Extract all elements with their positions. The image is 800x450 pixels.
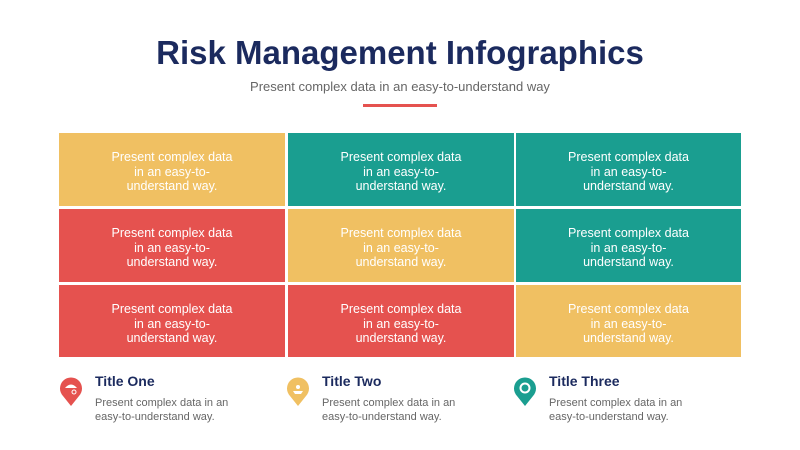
- cell r1c1: Present complex data: [112, 150, 232, 164]
- icon: teal pin: [514, 378, 536, 406]
- cell r2c1: understand way.: [127, 255, 217, 269]
- footer item three: Title Three: [549, 373, 620, 389]
- cell r1c2: [288, 133, 514, 206]
- cell r1c1: understand way.: [127, 179, 217, 193]
- cell r1c3: understand way.: [583, 179, 674, 193]
- title: Risk Management Infographics: [156, 34, 644, 71]
- cell r1c3: Present complex data: [568, 150, 689, 164]
- cell r3c3: in an easy-to-: [591, 316, 666, 330]
- cell r3c2: Present complex data: [341, 302, 461, 316]
- cell r3c2: [288, 285, 514, 357]
- cell r2c3: understand way.: [583, 255, 674, 269]
- cell r3c3: [516, 285, 741, 357]
- cell r1c3: in an easy-to-: [591, 164, 666, 178]
- icon: red pin: [60, 378, 82, 406]
- cell r2c2: [288, 209, 514, 282]
- cell r2c2: Present complex data: [341, 226, 461, 240]
- cell r3c1: [59, 285, 285, 357]
- cell r2c2: understand way.: [356, 255, 446, 269]
- cell r3c2: in an easy-to-: [363, 316, 439, 330]
- cell r2c3: [516, 209, 741, 282]
- cell r2c3: Present complex data: [568, 226, 689, 240]
- cell r2c3: in an easy-to-: [591, 240, 666, 254]
- cell r1c1: [59, 133, 285, 206]
- cell r3c3: understand way.: [583, 331, 674, 345]
- footer item two: Title Two: [322, 373, 381, 389]
- footer item one: [60, 373, 228, 423]
- cell r3c1: understand way.: [127, 331, 217, 345]
- footer item three: Present complex data in an easy-to-understand way.: [549, 397, 682, 423]
- footer item one: Title One: [95, 373, 155, 389]
- subtitle: Present complex data in an easy-to-understand way: [250, 79, 550, 94]
- cell r2c2: in an easy-to-: [363, 240, 439, 254]
- footer item two: [287, 373, 455, 423]
- footer item three: [514, 373, 682, 423]
- cell r3c3: Present complex data: [568, 302, 689, 316]
- cell r2c1: in an easy-to-: [134, 240, 210, 254]
- accent line: [363, 104, 437, 107]
- cell r1c3: [516, 133, 741, 206]
- cell r1c2: Present complex data: [341, 150, 461, 164]
- cell r1c2: understand way.: [356, 179, 446, 193]
- icon: yellow pin: [287, 378, 309, 406]
- cell r1c2: in an easy-to-: [363, 164, 439, 178]
- cell r3c2: understand way.: [356, 331, 446, 345]
- footer item two: Present complex data in an easy-to-understand way.: [322, 397, 455, 423]
- cell r1c1: in an easy-to-: [134, 164, 210, 178]
- cell r2c1: Present complex data: [112, 226, 232, 240]
- cell r3c1: Present complex data: [112, 302, 232, 316]
- cell r3c1: in an easy-to-: [134, 316, 210, 330]
- footer item one: Present complex data in an easy-to-understand way.: [95, 397, 228, 423]
- cell r2c1: [59, 209, 285, 282]
- grid matrix: [59, 133, 741, 357]
